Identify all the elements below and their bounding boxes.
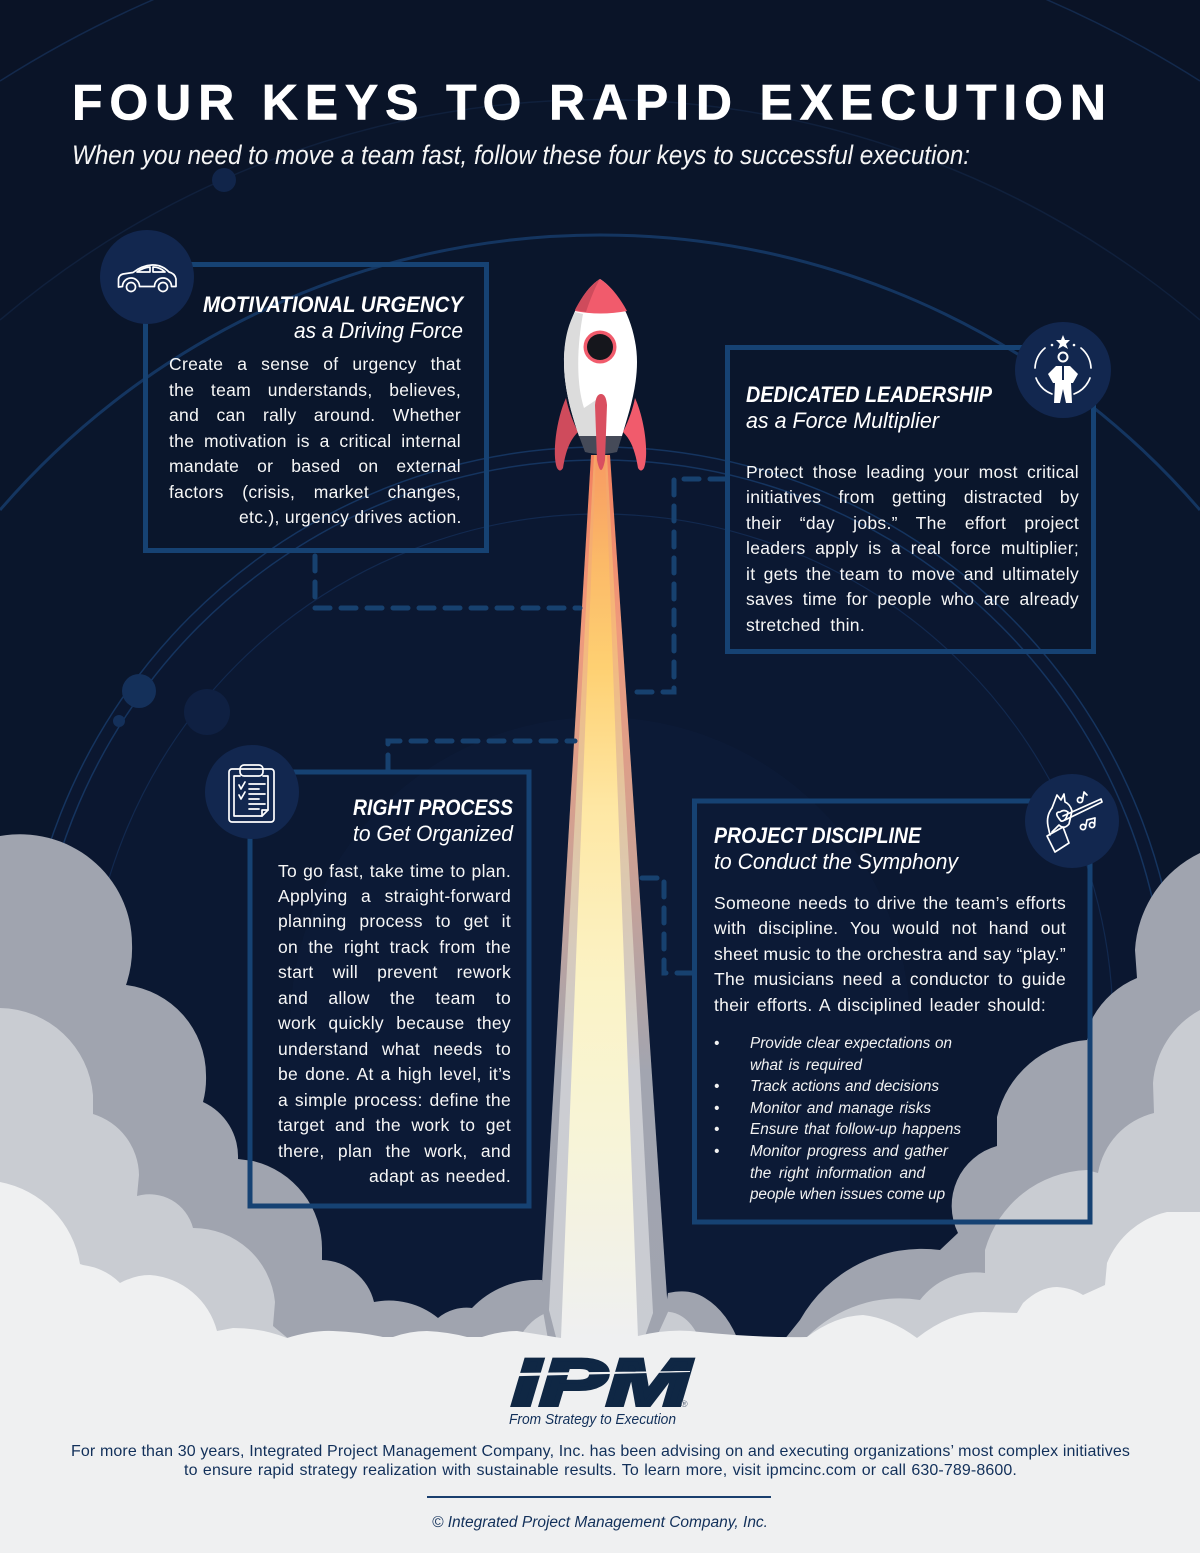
dashed connector: discipline box to flame: [640, 878, 692, 973]
rocket exhaust flame: [541, 455, 668, 1345]
subheading: to Conduct the Symphony: [714, 849, 960, 874]
smoke clouds: front layer: [0, 1182, 1200, 1553]
bulleted list: •: [714, 1143, 719, 1160]
body text: their efforts. A disciplined leader should:: [714, 994, 1046, 1014]
panel: dedicated leadership: [725, 322, 1111, 654]
body text: etc.), urgency drives action.: [239, 506, 462, 526]
icon: car: [118, 265, 176, 292]
body text: be done. At a high level, it’s: [278, 1064, 511, 1084]
bulleted list: what is required: [750, 1057, 862, 1074]
footer divider: [427, 1496, 771, 1498]
icon: clipboard checklist: [229, 765, 274, 822]
footer text: to ensure rapid strategy realization with sustainable results. To learn more, visit ipmcinc.com or call 630-789-8600.: [184, 1462, 1017, 1479]
panel: project discipline: [692, 774, 1119, 1224]
body text: it gets the team to move and ultimately: [746, 564, 1079, 584]
body text: [278, 860, 511, 1186]
body text: adapt as needed.: [369, 1166, 511, 1186]
bulleted list: Ensure that follow-up happens: [750, 1121, 961, 1138]
copyright: © Integrated Project Management Company, Inc.: [432, 1514, 768, 1531]
bulleted list: •: [714, 1035, 719, 1052]
bulleted list: people when issues come up: [750, 1186, 945, 1203]
body text: and can rally around. Whether: [169, 404, 461, 424]
footer text: For more than 30 years, Integrated Project Management Company, Inc. has been advising on and executing organizations’ most complex initiatives: [71, 1443, 1130, 1460]
title: FOUR KEYS TO RAPID EXECUTION: [72, 74, 1106, 130]
body text: Protect those leading your most critical: [746, 462, 1079, 482]
bulleted list: Monitor progress and gather: [750, 1143, 948, 1160]
panel: motivational urgency: [100, 230, 489, 553]
body text: on the right track from the: [278, 936, 511, 956]
body text: stretched thin.: [746, 614, 865, 634]
subheading: to Get Organized: [353, 821, 514, 846]
heading: DEDICATED LEADERSHIP: [746, 382, 992, 407]
body text: Someone needs to drive the team’s efforts: [714, 892, 1066, 912]
logo: IPM: ®: [681, 1399, 688, 1409]
body text: understand what needs to: [278, 1038, 511, 1058]
dashed connector: urgency box to flame: [315, 556, 580, 608]
logo: IPM: [509, 1350, 696, 1428]
panel: right process: [205, 745, 532, 1208]
bulleted list: •: [714, 1121, 719, 1138]
heading: RIGHT PROCESS: [353, 795, 513, 820]
body text: [746, 462, 1079, 634]
heading: MOTIVATIONAL URGENCY: [203, 292, 465, 317]
bulleted list: •: [714, 1100, 719, 1117]
body text: planning process to get it: [278, 910, 511, 930]
subtitle: When you need to move a team fast, follow these four keys to successful execution:: [72, 140, 970, 170]
body text: factors (crisis, market changes,: [169, 482, 461, 502]
body text: mandate or based on external: [169, 456, 461, 476]
bulleted list: Provide clear expectations on: [750, 1035, 952, 1052]
body text: To go fast, take time to plan.: [278, 860, 511, 880]
body text: work quickly because they: [278, 1012, 511, 1032]
bulleted list: Track actions and decisions: [750, 1078, 939, 1095]
body text: start will prevent rework: [278, 962, 511, 982]
bulleted list: •: [714, 1078, 719, 1095]
body text: initiatives from getting distracted by: [746, 486, 1079, 506]
icon: leader with star: [1035, 335, 1091, 403]
bulleted list: Monitor and manage risks: [750, 1100, 931, 1117]
footer text: [71, 1443, 1130, 1479]
icon: conductor hand and baton: [1047, 792, 1102, 852]
bulleted list: the right information and: [750, 1165, 925, 1182]
body text: target and the work to get: [278, 1114, 511, 1134]
smoke clouds: back layer: [0, 834, 1200, 1345]
body text: a simple process: define the: [278, 1090, 511, 1110]
dashed connector: leadership box to flame: [630, 479, 725, 692]
smoke clouds: middle layer: [0, 1008, 1200, 1345]
rocket: [555, 279, 646, 470]
body text: with discipline. You would not hand out: [714, 918, 1066, 938]
heading: PROJECT DISCIPLINE: [714, 823, 922, 848]
body text: leaders apply is a real force multiplier;: [746, 538, 1079, 558]
dashed connector: process box to flame: [388, 741, 575, 770]
subheading: as a Force Multiplier: [746, 408, 941, 433]
subheading: as a Driving Force: [294, 318, 463, 343]
body text: their “day jobs.” The effort project: [746, 512, 1079, 532]
body text: The musicians need a conductor to guide: [714, 968, 1066, 988]
body text: and allow the team to: [278, 988, 511, 1008]
body text: the motivation is a critical internal: [169, 430, 461, 450]
body text: saves time for people who are already: [746, 588, 1079, 608]
body text: there, plan the work, and: [278, 1140, 511, 1160]
body text: Applying a straight-forward: [278, 886, 511, 906]
body text: sheet music to the orchestra and say “play.”: [714, 944, 1066, 964]
logo: IPM: From Strategy to Execution: [509, 1411, 676, 1428]
body text: the team understands, believes,: [169, 380, 461, 400]
body text: Create a sense of urgency that: [169, 354, 461, 374]
bulleted list: [714, 1035, 961, 1203]
body text: [169, 354, 462, 526]
body text: [714, 892, 1066, 1014]
